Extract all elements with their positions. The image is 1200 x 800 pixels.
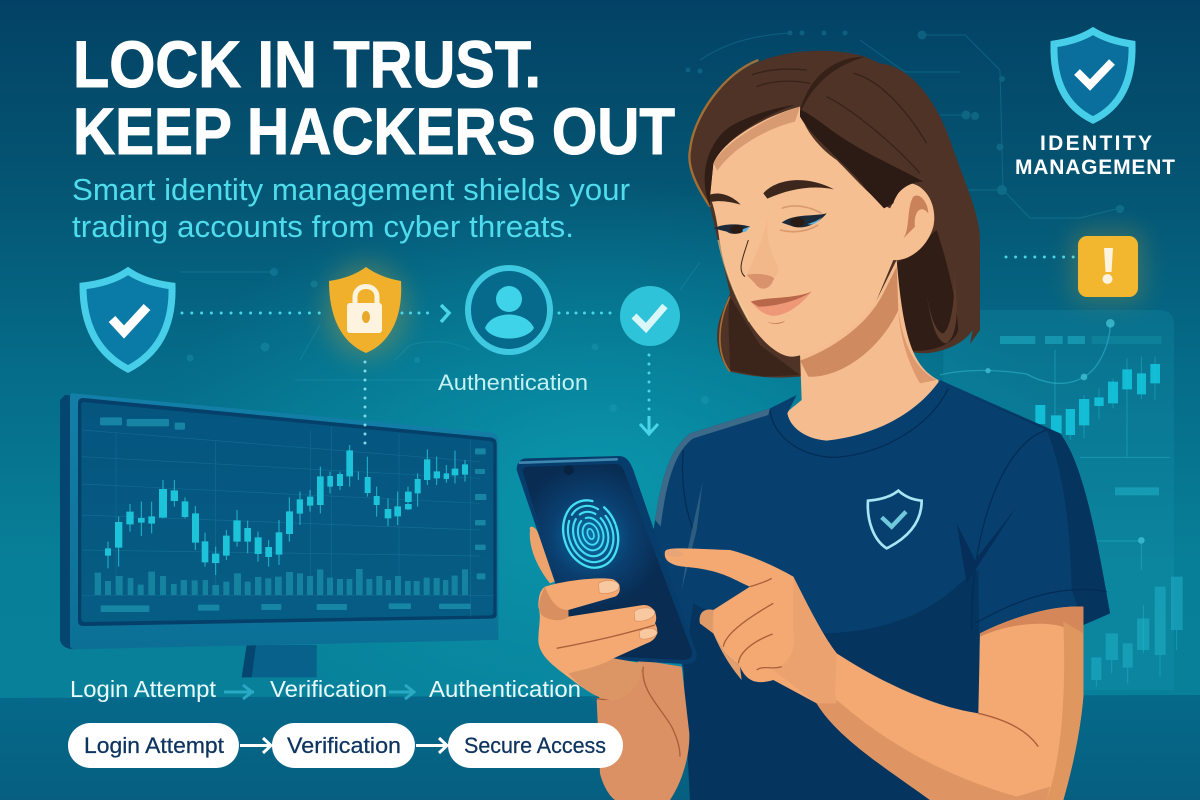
monitor stand xyxy=(242,645,317,677)
flow row: plain labels xyxy=(70,676,581,702)
face xyxy=(709,107,934,357)
arrow: lock to authentication xyxy=(402,305,449,322)
pill: secure access: Secure Access xyxy=(464,733,606,758)
right arm and pointing hand xyxy=(665,548,1083,800)
dotted connector: user to check xyxy=(559,312,612,314)
title: KEEP HACKERS OUT xyxy=(73,94,675,168)
icon: identity shield xyxy=(1054,31,1132,120)
arm shading xyxy=(980,607,1083,637)
title xyxy=(73,27,675,168)
flow row: pills xyxy=(68,723,623,768)
eyes xyxy=(782,213,827,227)
pill: login attempt xyxy=(68,723,239,768)
icon: blue check shield xyxy=(83,271,172,369)
candlesticks xyxy=(105,445,468,575)
phone xyxy=(517,456,697,664)
hair front xyxy=(705,57,927,208)
subtitle xyxy=(72,172,630,244)
mouth xyxy=(751,292,812,316)
monitor with candlestick chart xyxy=(60,393,498,677)
title: LOCK IN TRUST. xyxy=(73,27,541,101)
identity management label xyxy=(1015,132,1175,179)
ear xyxy=(903,195,928,238)
icon: fingerprint xyxy=(555,493,627,575)
icon: warning badge xyxy=(1072,230,1144,303)
neck xyxy=(783,260,947,447)
phone-holding arm, thumb behind phone xyxy=(530,527,689,800)
brows xyxy=(709,180,834,205)
dotted connector: shield to lock xyxy=(182,312,324,314)
identity management label: IDENTITY xyxy=(1040,132,1152,155)
nose xyxy=(747,207,778,280)
arrow: check down to phone xyxy=(640,355,658,434)
flow row: plain labels: Verification xyxy=(270,676,387,702)
dotted line: lock down to monitor xyxy=(364,362,366,452)
subtitle: Smart identity management shields your xyxy=(72,172,630,207)
hair back xyxy=(689,51,980,378)
flow row: plain labels: Login Attempt xyxy=(70,676,216,702)
background circuit lines xyxy=(180,30,1124,499)
panel: background trading chart, right xyxy=(940,310,1183,690)
pill: login attempt: Login Attempt xyxy=(84,733,224,758)
woman xyxy=(517,51,1110,800)
dotted connector to warning xyxy=(1006,256,1074,258)
monitor screen xyxy=(78,398,497,626)
icon: user circle xyxy=(468,268,550,352)
icon: gold padlock shield xyxy=(324,262,408,358)
pill: secure access xyxy=(448,723,623,768)
identity management label: MANAGEMENT xyxy=(1015,156,1175,179)
icon: check circle xyxy=(620,286,680,346)
flow row: plain labels: Authentication xyxy=(429,676,581,702)
monitor frame xyxy=(60,393,498,649)
arrow: login to verification xyxy=(240,738,271,753)
shirt shading xyxy=(683,570,983,800)
shirt shield logo xyxy=(868,491,922,548)
shirt xyxy=(650,380,1110,800)
pill: verification: Verification xyxy=(287,733,401,758)
volume bars xyxy=(95,569,468,595)
authentication label: Authentication xyxy=(438,370,588,395)
pill: verification xyxy=(272,723,415,768)
left hand fingers xyxy=(538,578,657,700)
subtitle: trading accounts from cyber threats. xyxy=(72,209,574,244)
arrow: verification to secure access xyxy=(416,738,447,753)
